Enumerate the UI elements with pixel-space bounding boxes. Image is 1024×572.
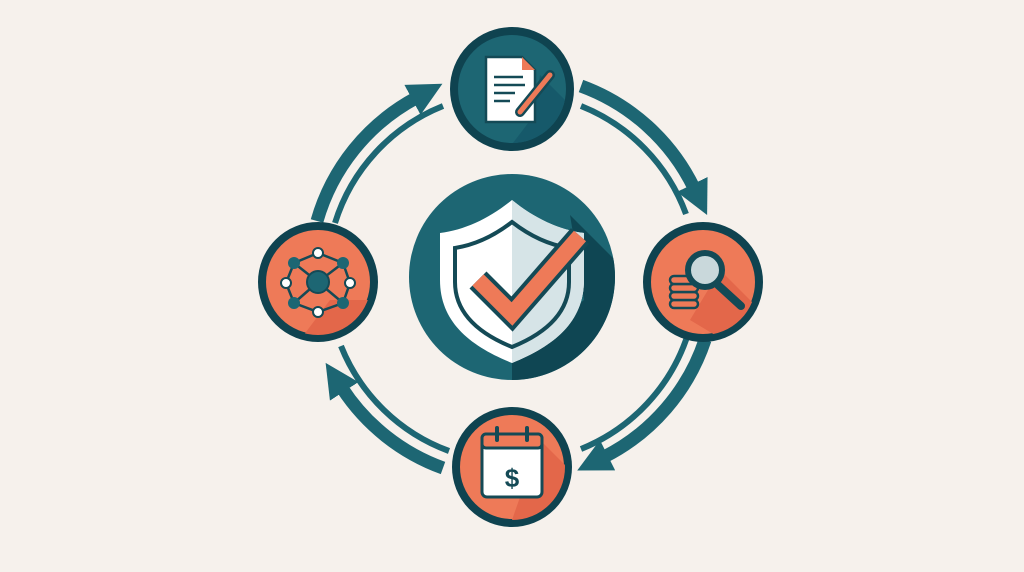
cycle diagram: [258, 27, 763, 527]
node: left network: [262, 226, 374, 340]
arrows: inner ring: [335, 106, 688, 451]
center: shield with check: [409, 174, 615, 380]
arrows: outer cycle: [317, 86, 705, 468]
node: top document with pen: [454, 31, 580, 160]
node: right coins with magnifier: [647, 226, 770, 350]
node: bottom calendar with dollar: [456, 411, 580, 530]
node: bottom calendar with dollar: $: [505, 463, 520, 493]
